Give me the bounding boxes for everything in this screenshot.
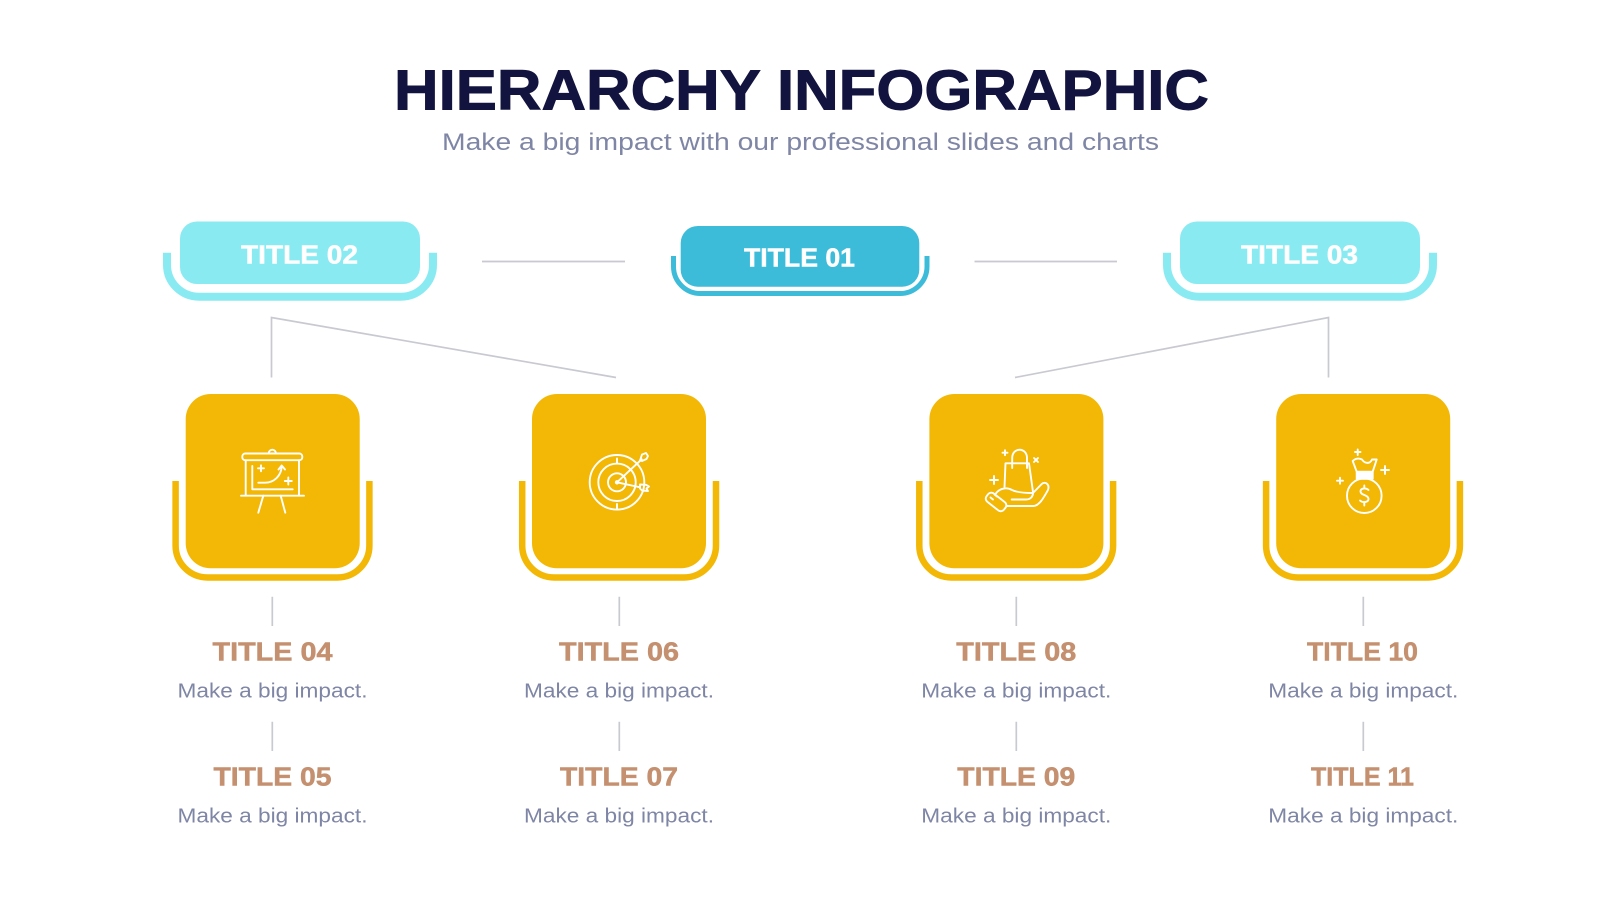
- text block: title 10: [1268, 639, 1458, 702]
- connector lines: column ticks: [272, 597, 1363, 751]
- text block: title 05: Make a big impact.: [178, 805, 368, 827]
- icon: presentation board: [241, 450, 304, 513]
- text block: title 10: Make a big impact.: [1268, 680, 1458, 702]
- text block: title 06: Make a big impact.: [524, 680, 714, 702]
- subtitle: Make a big impact with our professional slides and charts: [442, 129, 1159, 156]
- text block: title 08: Make a big impact.: [921, 680, 1111, 702]
- text block: title 11: [1268, 764, 1458, 827]
- text block: title 09: Make a big impact.: [921, 805, 1111, 827]
- text block: title 06: [524, 639, 714, 702]
- icon: target with arrows: [590, 453, 649, 510]
- text block: title 09: [921, 764, 1111, 827]
- icon: hand holding shopping bag: [984, 450, 1048, 513]
- text block: title 04: TITLE 04: [212, 639, 333, 667]
- panel: column 1 card: [176, 394, 369, 578]
- connector lines: top level: [272, 262, 1328, 378]
- title: HIERARCHY INFOGRAPHIC: [394, 58, 1209, 121]
- panel: title 03 box: [1167, 222, 1433, 297]
- panel: title 01 box: [674, 226, 927, 294]
- panel: column 3 card: [919, 394, 1113, 578]
- icon: money bag: [1337, 450, 1389, 513]
- text block: title 07: TITLE 07: [560, 764, 678, 792]
- text block: title 08: TITLE 08: [956, 639, 1076, 667]
- panel: column 2 card: [522, 394, 716, 578]
- text block: title 05: TITLE 05: [214, 764, 332, 792]
- text block: title 04: Make a big impact.: [178, 680, 368, 702]
- panel: title 01 box: TITLE 01: [744, 243, 855, 273]
- text block: title 07: [524, 764, 714, 827]
- panel: title 02 box: [167, 222, 433, 297]
- text block: title 07: Make a big impact.: [524, 805, 714, 827]
- text block: title 11: TITLE 11: [1311, 764, 1414, 792]
- text block: title 11: Make a big impact.: [1268, 805, 1458, 827]
- panel: title 03 box: TITLE 03: [1241, 241, 1358, 269]
- text block: title 09: TITLE 09: [957, 764, 1075, 792]
- panel: column 4 card: [1266, 394, 1460, 578]
- panel: title 02 box: TITLE 02: [241, 241, 358, 269]
- text block: title 06: TITLE 06: [559, 639, 679, 667]
- text block: title 05: [178, 764, 368, 827]
- text block: title 04: [178, 639, 368, 702]
- text block: title 10: TITLE 10: [1307, 639, 1418, 667]
- text block: title 08: [921, 639, 1111, 702]
